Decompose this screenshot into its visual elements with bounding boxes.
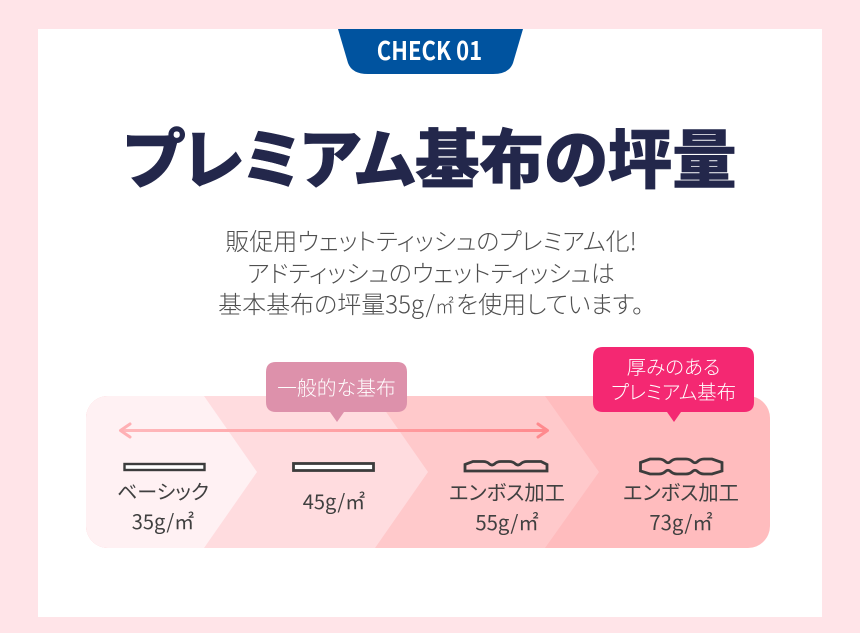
label: 45g: 45g/㎡ [303,486,365,515]
profile: 45g sheet [294,464,374,470]
callout: standard base cloth: 一般的な基布 [277,372,396,401]
profile: embossed 73g sheet [640,459,722,474]
badge: CHECK 01: CHECK 01 [377,31,482,68]
label: emboss 73g: 73g/㎡ [649,506,713,536]
description text: 基本基布の坪量35g/㎡を使用しています。 [218,285,644,320]
profile: basic sheet [124,464,204,470]
label: emboss 73g: エンボス加工 [623,476,739,506]
label: basic 35g: ベーシック [117,476,209,505]
label: emboss 55g [449,476,565,536]
title: プレミアム基布の坪量 [123,108,737,202]
description text [218,222,644,320]
profile: embossed 55g sheet [465,462,547,471]
weight comparison chart [86,396,770,548]
badge: CHECK 01 [338,29,523,74]
description text: 販促用ウェットティッシュのプレミアム化! [225,222,637,257]
label: basic 35g [117,476,209,535]
label: emboss 55g: エンボス加工 [449,476,565,506]
range arrow [120,424,548,437]
callout: premium base cloth: プレミアム基布 [611,376,736,405]
description text: アドティッシュのウェットティッシュは [247,254,615,288]
label: basic 35g: 35g/㎡ [132,506,194,535]
callout: premium base cloth [593,347,754,422]
callout: premium base cloth: 厚みのある [627,351,720,380]
label: emboss 73g [623,476,739,536]
callout: standard base cloth [266,362,407,422]
label: emboss 55g: 55g/㎡ [475,506,539,536]
